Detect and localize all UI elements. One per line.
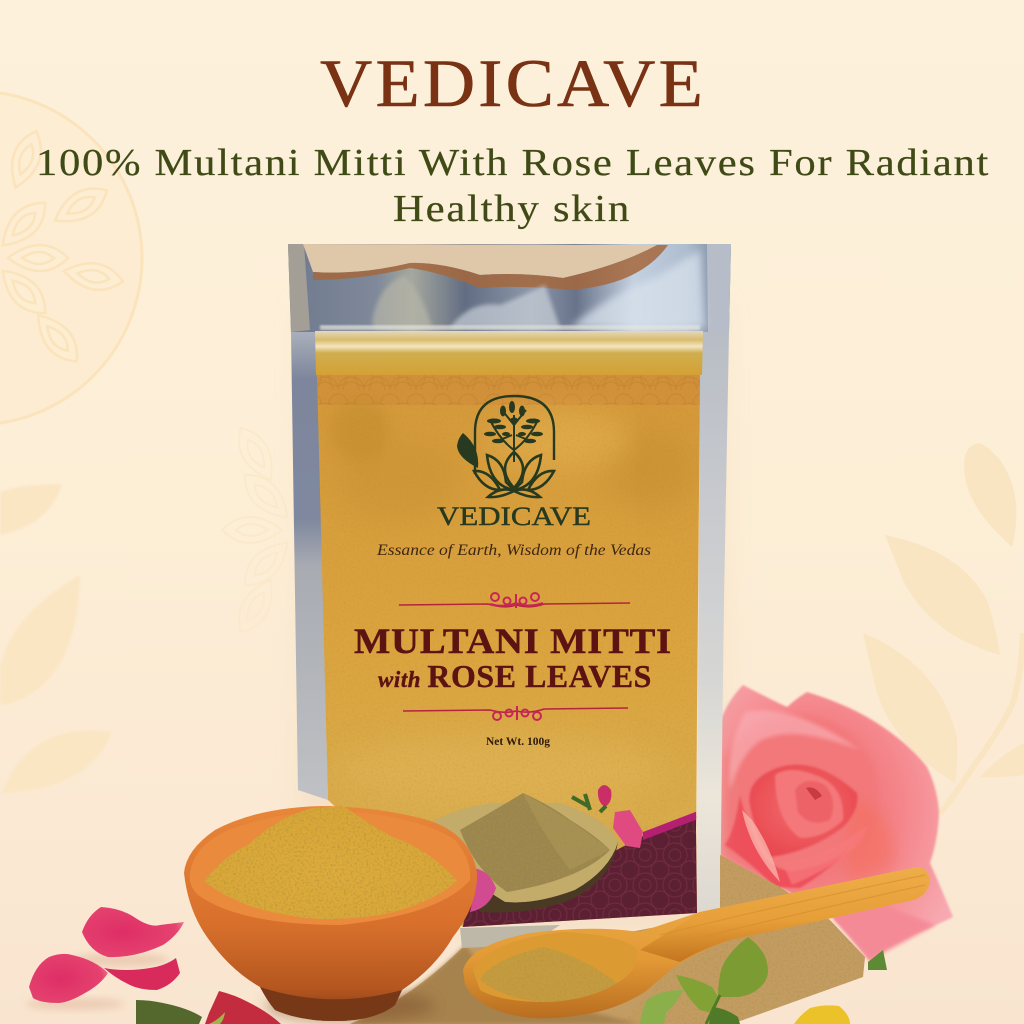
product pouch <box>288 244 731 930</box>
product name: MULTANI MITTI <box>354 621 672 661</box>
subtitle: 100% Multani Mitti With Rose Leaves For Radiant <box>36 142 990 184</box>
foil top section <box>288 244 731 332</box>
ornament divider bottom <box>403 706 628 720</box>
kraft label <box>317 375 700 927</box>
shadow of bowl <box>265 990 435 1022</box>
ornament divider top <box>399 593 630 608</box>
pouch illustration: powder in brass dish <box>430 785 643 912</box>
top pattern band <box>317 375 701 405</box>
tagline: Essance of Earth, Wisdom of the Vedas <box>376 542 651 559</box>
rose petals <box>25 907 281 1024</box>
green leaf lower left <box>136 1000 225 1024</box>
seal band <box>315 331 703 375</box>
cloth under spoon <box>350 855 865 1024</box>
decorative mandala left <box>0 91 142 425</box>
green herb leaves <box>640 937 768 1024</box>
subtitle: Healthy skin <box>393 188 631 230</box>
net weight: Net Wt. 100g <box>486 736 550 748</box>
yellow petal bottom <box>794 1005 850 1024</box>
clay bowl with powder <box>184 806 477 1021</box>
left foil strip <box>291 332 328 800</box>
brand logo <box>457 396 554 497</box>
title: VEDICAVE <box>320 45 706 121</box>
wooden spoon with powder <box>463 867 930 1018</box>
decorative mandala centre faint <box>221 427 288 633</box>
rose flower <box>720 685 953 970</box>
brand name on pouch: VEDICAVE <box>437 502 591 531</box>
decorative leaves right <box>863 443 1024 813</box>
pouch shadow <box>300 300 725 930</box>
right foil strip <box>697 332 729 914</box>
decorative leaves left <box>0 484 112 793</box>
illustrated flowers <box>598 785 611 807</box>
maroon corner <box>463 815 698 927</box>
subtitle <box>36 142 990 230</box>
product name line 2: with ROSE LEAVES <box>378 658 652 694</box>
